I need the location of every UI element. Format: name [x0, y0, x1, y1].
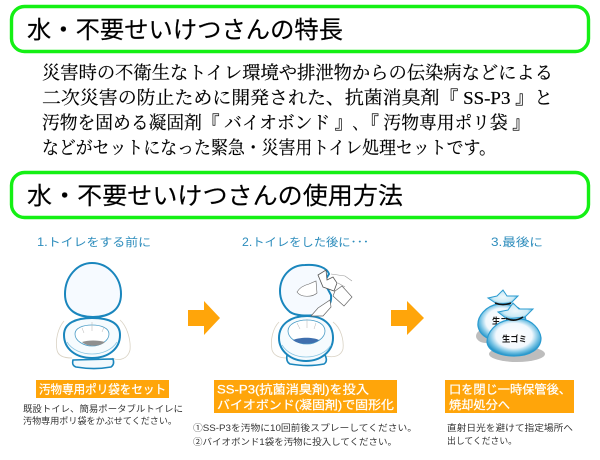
text block: step 2 notes: ②バイオボンド1袋を汚物に投入してください。 — [193, 436, 397, 447]
text block: step 3 note — [447, 422, 573, 446]
heading: features — [12, 6, 588, 52]
icon: garbage bags: 生ゴ — [492, 316, 509, 326]
step 1 label: 1.トイレをする前に — [37, 235, 151, 249]
callout: step 3: 口を閉じ一時保管後、 — [449, 382, 571, 396]
text block: step 1 note — [23, 403, 183, 426]
step 2 label: 2.トイレをした後に･･･ — [242, 235, 369, 249]
text block: product description: 汚物を固める凝固剤『 バイオボンド 』､『 汚物専用ポリ袋 』 — [42, 113, 530, 133]
icon: garbage bags: 生ゴミ — [502, 334, 527, 344]
heading: usage — [12, 172, 588, 218]
callout: step 2: バイオボンド(凝固剤)で固形化 — [217, 397, 394, 412]
text block: step 1 note: 汚物専用ポリ袋をかぶせてください。 — [23, 415, 177, 426]
callout: step 1: 汚物専用ポリ袋をセット — [39, 382, 166, 396]
callout: step 2 — [214, 380, 397, 413]
callout: step 3: 焼却処分へ — [449, 398, 510, 412]
callout: step 2: SS-P3(抗菌消臭剤)を投入 — [217, 382, 369, 396]
heading: features: 水・不要せいけつさんの特長 — [27, 17, 343, 44]
text block: product description: などがセットになった緊急・災害用トイレ処理セットです。 — [42, 138, 496, 158]
text block: step 3 note: 直射日光を避けて指定場所へ — [447, 422, 573, 433]
text block: product description — [42, 63, 553, 158]
text block: step 1 note: 既設トイレ、簡易ポータブルトイレに — [23, 403, 183, 414]
heading: usage: 水・不要せいけつさんの使用方法 — [27, 183, 403, 210]
text block: step 2 notes: ①SS-P3を汚物に10回前後スプレーしてください。 — [193, 422, 417, 433]
callout: step 3 — [445, 380, 574, 413]
step 3 label: 3.最後に — [491, 235, 543, 249]
text block: product description: 二次災害の防止ために開発された、抗菌消臭剤『 SS-P3 』と — [42, 88, 553, 108]
text block: step 3 note: 出してください。 — [447, 435, 517, 446]
icon: garbage bags — [476, 290, 545, 362]
arrow 2 — [391, 301, 424, 335]
text block: step 2 notes — [193, 422, 417, 447]
icon: toilet with spray — [271, 265, 352, 366]
icon: toilet with bag set — [56, 263, 130, 368]
arrow 1 — [188, 301, 220, 335]
text block: product description: 災害時の不衛生なトイレ環境や排泄物からの伝染病などによる — [42, 63, 553, 83]
